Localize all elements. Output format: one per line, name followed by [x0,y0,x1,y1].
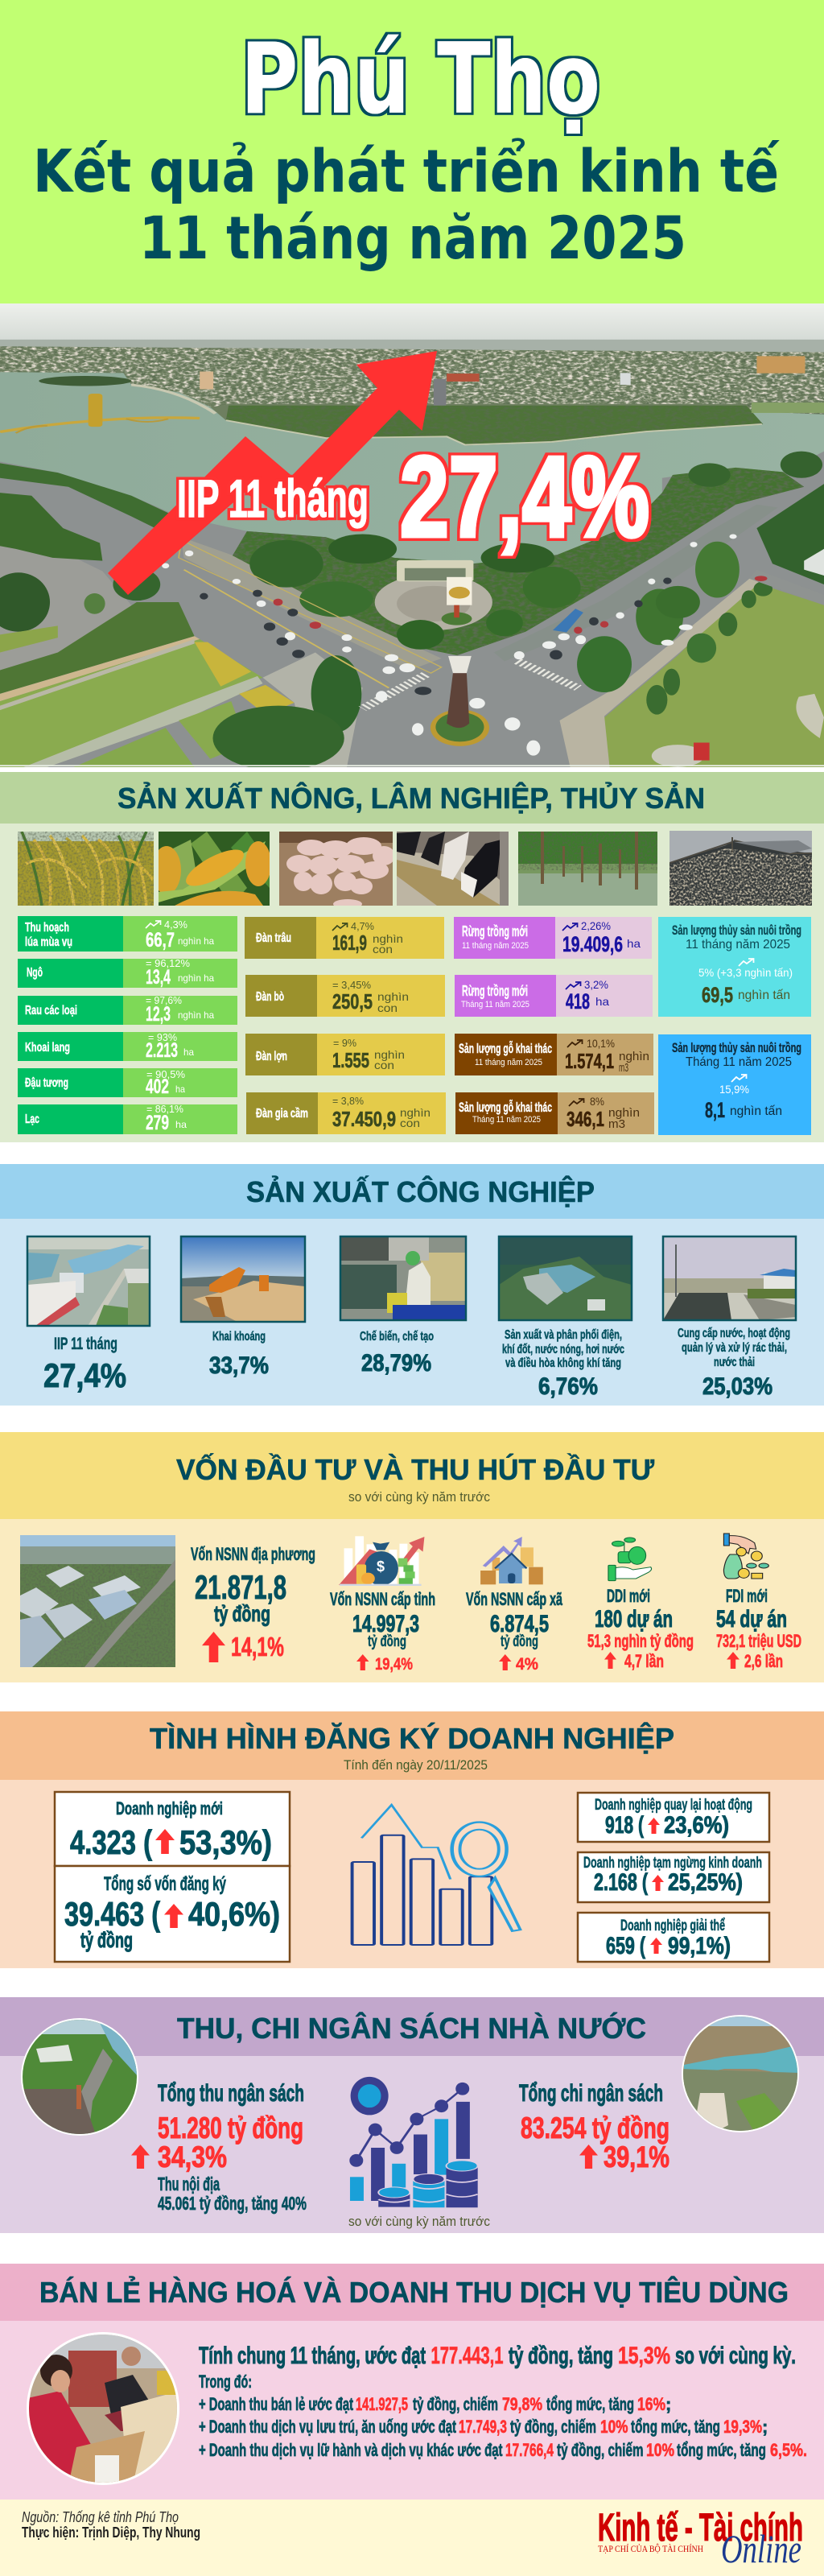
row: sweet potato: ha [183,1046,194,1058]
arrow: up 2,6 times [727,1652,740,1669]
label: of which: Trong đó: [199,2372,252,2392]
card: aquaculture 11 months [658,917,811,1017]
row: pigs: 1.555 [332,1048,369,1072]
summary sentence: 177.443,1 [431,2343,504,2369]
bullet: retail revenue: 16% [637,2394,665,2414]
row: pigs: Đàn lợn [256,1050,287,1063]
row: buffalo: Đàn trâu [256,931,291,945]
stat: FDI: FDI mới [726,1586,768,1606]
arrow: up 34,3% [131,2145,150,2169]
title banner [0,0,824,303]
stat: commune budget capital: Vốn NSNN cấp xã [466,1589,562,1609]
card: registered capital: Tổng số vốn đăng ký [104,1873,226,1895]
photo: fish farming [670,831,812,906]
stat: water and waste: 25,03% [702,1373,772,1400]
row: poultry: 37.450,9 [332,1107,396,1131]
bullet: accommodation and food revenue: ; [762,2417,768,2437]
row: rice harvest: nghìn ha [178,935,214,947]
row: sweet potato: = 93% [148,1031,177,1043]
stat: mining: Khai khoáng [212,1330,266,1344]
stat: total expenditure: 39,1% [604,2140,670,2174]
stat: total revenue: Thu nội địa [158,2174,220,2194]
stat: provincial budget capital: tỷ đồng [368,1633,406,1650]
row: pigs: nghìn [374,1048,405,1061]
icon: hand holding seedling and coin [608,1538,652,1581]
card: aquaculture November: 15,9% [719,1083,749,1096]
row: buffalo [245,917,444,959]
card: registered capital: 40,6%) [188,1895,280,1933]
card: new enterprises: Doanh nghiệp mới [116,1798,223,1818]
bullet: retail revenue: + Doanh thu bán lẻ ước đạt [199,2394,353,2414]
arrow: up 39,1% [579,2145,598,2169]
arrow: up 14,1% [202,1632,225,1662]
row: buffalo: 4,7% [351,920,374,932]
stat: mining: 33,7% [209,1352,269,1379]
arrow: up 4% [499,1654,512,1670]
stat: water and waste: nước thải [714,1356,755,1369]
row: new forest November: 418 [566,989,590,1013]
heading: retail: BÁN LẺ HÀNG HOÁ VÀ DOANH THU DỊCH VỤ TIÊU DÙNG [39,2275,789,2309]
stat: total revenue: Tổng thu ngân sách [158,2080,304,2107]
source credit: Nguồn: Thống kê tỉnh Phú Thọ [22,2509,179,2525]
stat: total expenditure: 83.254 tỷ đồng [521,2112,670,2145]
panel: retail and consumer services [0,2264,824,2500]
row: new forest November: Rừng trồng mới [462,983,528,999]
card: registered capital [55,1866,290,1962]
card: registered capital: 39.463 ( [64,1895,160,1933]
row: soybean: Đậu tương [25,1076,68,1090]
row: timber November: Tháng 11 năm 2025 [472,1115,541,1125]
row: new forest 11 months: 19.409,6 [562,932,623,956]
icon: house with coin stacks [480,1537,543,1584]
card: resumed operations [578,1793,769,1842]
stat: manufacturing [360,1330,434,1377]
row: soybean: 402 [146,1075,169,1098]
row: vegetables: Rau các loại [25,1004,77,1018]
bullet: retail revenue: 141.927,5 [356,2394,408,2414]
row: timber November: m3 [608,1117,625,1131]
row: cattle [245,975,445,1017]
stat: total revenue: 34,3% [158,2140,227,2174]
photo: pigs [279,832,393,906]
row: poultry [246,1092,446,1134]
forestry table [454,917,654,1134]
publisher logo [598,2507,803,2571]
row: rice harvest [18,916,237,952]
row: cattle: 250,5 [332,989,373,1013]
panel: state budget [0,1997,824,2233]
crop table [18,916,237,1134]
stat: FDI [716,1586,801,1671]
stat: FDI: 2,6 lần [744,1651,783,1671]
bullet: travel and other services revenue: + Doanh thu dịch vụ lữ hành và dịch vụ khác ước đạt [199,2440,503,2460]
stat: DDI: 180 dự án [595,1606,673,1633]
photo: circular aerial city left [21,2017,138,2137]
row: cattle: Đàn bò [256,990,284,1004]
frame: photo 1 [27,1236,150,1326]
row: pigs: = 9% [333,1037,356,1049]
row: new forest November: ha [595,995,609,1008]
stat: local budget capital: 14,1% [231,1632,284,1662]
card: registered capital: tỷ đồng [80,1928,133,1952]
photo: corn [159,832,270,906]
photo: industrial park [28,1237,149,1325]
bullet: retail revenue: tổng mức, tăng [546,2394,634,2414]
row: peanut: Lạc [25,1113,39,1126]
card: aquaculture November: Tháng 11 năm 2025 [686,1055,792,1069]
photo: mining excavator [182,1237,304,1321]
row: vegetables: = 97,6% [146,994,182,1006]
icon: money bag with growth chart: $ [377,1558,385,1575]
row: peanut: ha [175,1119,187,1130]
stat: manufacturing: Chế biến, chế tạo [360,1330,434,1344]
subtitle line 2: 11 tháng năm 2025 [139,204,686,273]
frame: photo 4 [499,1236,632,1320]
row: timber November: Sản lượng gỗ khai thác [459,1100,552,1115]
photo: rice [18,832,154,906]
stat: electricity: khí đốt, nước nóng, hơi nước [502,1343,624,1356]
card: aquaculture November: nghìn tấn [730,1104,782,1118]
bullet: accommodation and food revenue: tỷ đồng, chiếm [510,2417,596,2437]
stat: mining [209,1330,269,1379]
card: dissolved: 659 ( [606,1933,645,1959]
stat: DDI: 4,7 lần [624,1651,664,1671]
footer [0,2500,824,2576]
stat: electricity [502,1328,624,1400]
hero photo: aerial view of the city and lake [0,303,824,767]
row: pigs: con [374,1059,394,1071]
icon: money bag with growth chart [339,1536,424,1586]
stat: total expenditure [519,2080,670,2174]
main title: Phú Thọ: Phú Thọ [241,23,600,136]
card: dissolved: 99,1%) [668,1933,731,1959]
stat: commune budget capital [466,1589,562,1674]
row: timber 11 months: 1.574,1 [565,1049,614,1073]
row: timber 11 months: nghìn [619,1050,649,1063]
row: poultry: Đàn gia cầm [256,1107,308,1121]
row: timber November: 346,1 [566,1107,604,1131]
row: poultry: con [400,1117,420,1129]
panel: agriculture, forestry, fishery [0,772,824,1142]
card: aquaculture 11 months: 5% (+3,3 nghìn tấn) [698,966,793,979]
row: vegetables: 12,3 [146,1003,171,1026]
panel: investment capital [0,1432,824,1682]
row: buffalo: 161,9 [332,931,367,955]
bullet: retail revenue: ; [665,2394,671,2414]
panel: industrial production [0,1164,824,1406]
card: new enterprises: 4.323 ( [70,1823,152,1861]
summary sentence: Tính chung 11 tháng, ước đạt [199,2343,426,2369]
heading: agriculture: SẢN XUẤT NÔNG, LÂM NGHIỆP, THỦY SẢN [117,781,705,815]
publisher logo: TẠP CHÍ CỦA BỘ TÀI CHÍNH [598,2543,703,2554]
photo: manufacturing workshop [341,1237,465,1319]
authors credit: Thực hiện: Trịnh Diệp, Thy Nhung [22,2524,200,2541]
row: buffalo: con [373,943,393,956]
heading: budget: THU, CHI NGÂN SÁCH NHÀ NƯỚC [177,2011,646,2045]
row: peanut: 279 [146,1112,169,1134]
red growth arrow [108,351,437,595]
photo: industrial zone aerial [20,1535,175,1667]
stat: local budget capital: Vốn NSNN địa phương [191,1544,315,1564]
row: sweet potato: 2.213 [146,1039,178,1062]
card: resumed operations: 23,6%) [664,1812,729,1839]
stat: commune budget capital: 4% [516,1655,538,1674]
row: new forest November: Tháng 11 năm 2025 [461,1000,529,1009]
card: temporarily suspended: 25,25%) [668,1869,743,1896]
row: peanut: = 86,1% [146,1103,183,1115]
card: aquaculture 11 months: nghìn tấn [738,989,790,1002]
row: timber 11 months: m3 [619,1061,628,1075]
bullet: accommodation and food revenue: + Doanh thu dịch vụ lưu trú, ăn uống ước đạt [199,2417,456,2437]
stat: DDI [587,1586,694,1671]
photo: planted forest [518,832,657,906]
bullet: retail revenue: 79,8% [502,2394,542,2414]
row: cattle: nghìn [377,990,409,1003]
row: timber 11 months: 11 tháng năm 2025 [475,1058,542,1067]
bullet: retail revenue [199,2394,671,2414]
row: timber 11 months [455,1034,653,1075]
stat: FDI: 54 dự án [716,1606,787,1633]
row: peanut [18,1103,237,1134]
photo: dairy cows [397,832,509,906]
caption: compared to last year: so với cùng kỳ năm trước [348,2214,490,2229]
subheading: compared to last year: so với cùng kỳ năm trước [348,1489,490,1505]
row: cattle: con [377,1001,398,1014]
row: new forest 11 months [454,917,652,959]
stat: local budget capital: tỷ đồng [214,1601,270,1626]
stat: DDI: 51,3 nghìn tỷ đồng [587,1631,694,1651]
card: dissolved: Doanh nghiệp giải thể [620,1918,725,1934]
card: temporarily suspended: 2.168 ( [594,1869,648,1896]
card: aquaculture 11 months: 11 tháng năm 2025 [686,938,790,952]
bullet: accommodation and food revenue: 10% [600,2417,628,2437]
row: rice harvest: lúa mùa vụ [25,935,72,949]
card: new enterprises [55,1792,290,1866]
bullet: travel and other services revenue: 17.766,4 [505,2440,554,2460]
row: buffalo: nghìn [373,932,403,945]
stat: water and waste [678,1327,790,1400]
frame: photo 3 [340,1236,466,1320]
stat: IIP [43,1335,126,1394]
card: aquaculture 11 months: 69,5 [702,983,733,1007]
icon: coins and rising bars [349,2077,478,2207]
row: sweet potato: Khoai lang [25,1041,70,1055]
stat: commune budget capital: tỷ đồng [501,1633,538,1650]
heading: enterprise registration: TÌNH HÌNH ĐĂNG KÝ DOANH NGHIỆP [150,1721,674,1755]
row: rice harvest: 66,7 [146,929,175,952]
bullet: travel and other services revenue: tỷ đồng, chiếm [557,2440,644,2460]
arrow: up 4,7 times [604,1652,616,1669]
arrow: up 19,4% [356,1654,369,1670]
bullet: travel and other services revenue: 10% [646,2440,674,2460]
stat: provincial budget capital [330,1589,435,1674]
row: poultry: = 3,8% [332,1095,364,1107]
bullet: accommodation and food revenue: 19,3% [723,2417,762,2437]
stat: total revenue [131,2080,307,2214]
stat: total revenue: 51.280 tỷ đồng [158,2112,303,2145]
row: rice harvest: 4,3% [164,919,187,931]
row: maize: = 96,12% [146,957,190,969]
row: timber November: nghìn [608,1106,640,1120]
row: timber November: 8% [590,1095,604,1108]
row: maize [18,957,237,989]
stat: DDI: DDI mới [607,1586,650,1606]
row: maize: Ngô [27,966,43,980]
summary sentence: tỷ đồng, tăng [509,2343,613,2369]
panel: enterprise registration [0,1711,824,1968]
stat: provincial budget capital: Vốn NSNN cấp tỉnh [330,1589,435,1609]
row: soybean: = 90,5% [146,1068,185,1080]
hero label: IIP 11 tháng: IIP 11 tháng [177,469,369,528]
photo: circular aerial city right [682,2015,799,2136]
bullet: travel and other services revenue: 6,5%. [770,2440,807,2460]
row: vegetables: nghìn ha [178,1009,214,1021]
row: new forest November: 3,2% [584,978,608,991]
stat: electricity: và điều hòa không khí tăng [505,1356,621,1370]
card: new enterprises: 53,3%) [179,1823,272,1861]
row: soybean: ha [175,1084,185,1095]
row: sweet potato [18,1031,237,1062]
row: timber 11 months: Sản lượng gỗ khai thác [459,1041,552,1056]
card: dissolved [578,1913,769,1962]
icon: bar chart with magnifier [352,1805,521,1945]
icon: hand dropping coin into money plant [723,1534,768,1579]
subheading: as of date: Tính đến ngày 20/11/2025 [344,1757,488,1773]
stat: IIP: IIP 11 tháng [54,1335,117,1353]
bullet: retail revenue: tỷ đồng, chiếm [413,2394,498,2414]
row: maize: nghìn ha [178,972,214,984]
row: maize: 13,4 [146,966,171,989]
stat: total expenditure: Tổng chi ngân sách [519,2080,663,2107]
row: pigs [245,1034,445,1075]
stat: local budget capital: 21.871,8 [195,1568,286,1606]
stat: provincial budget capital: 19,4% [375,1655,413,1674]
summary sentence: 15,3% [618,2343,670,2369]
row: soybean [18,1068,237,1098]
stat: electricity: Sản xuất và phân phối điện, [505,1328,622,1342]
frame: photo 2 [181,1236,305,1322]
row: new forest 11 months: ha [627,937,641,950]
card: aquaculture November [658,1034,811,1135]
livestock table [245,917,446,1134]
bullet: accommodation and food revenue: tổng mức, tăng [631,2417,720,2437]
row: new forest November [455,975,653,1017]
photo: water treatment [664,1237,795,1319]
frame: photo 5 [663,1236,796,1320]
row: cattle: = 3,45% [332,979,371,991]
card: aquaculture November: 8,1 [705,1098,725,1122]
row: timber 11 months: 10,1% [587,1037,615,1050]
row: new forest 11 months: Rừng trồng mới [462,923,528,939]
heading: investment: VỐN ĐẦU TƯ VÀ THU HÚT ĐẦU TƯ [176,1452,654,1486]
stat: provincial budget capital: 14.997,3 [352,1611,419,1637]
bullet: accommodation and food revenue [199,2417,768,2437]
stat: total revenue: 45.061 tỷ đồng, tăng 40% [158,2193,307,2214]
stat: local budget capital [191,1544,315,1662]
stat: IIP: 27,4% [43,1356,126,1394]
row: poultry: nghìn [400,1106,431,1119]
bullet: accommodation and food revenue: 17.749,3 [459,2417,507,2437]
row: vegetables [18,994,237,1026]
stat: manufacturing: 28,79% [361,1350,431,1377]
photo: circular supermarket shoppers [24,2332,180,2485]
card: resumed operations: 918 ( [605,1812,644,1839]
photo: power plant [500,1237,631,1319]
row: rice harvest: Thu hoạch [25,921,69,935]
card: temporarily suspended [578,1852,769,1902]
heading: industry: SẢN XUẤT CÔNG NGHIỆP [246,1174,595,1208]
row: timber November [455,1092,654,1134]
summary sentence [199,2343,796,2369]
stat: commune budget capital: 6.874,5 [490,1611,549,1637]
bullet: travel and other services revenue: tổng mức, tăng [677,2440,766,2460]
row: new forest 11 months: 2,26% [581,919,611,932]
stat: electricity: 6,76% [538,1373,598,1400]
row: new forest 11 months: 11 tháng năm 2025 [462,941,529,951]
hero figure: 27,4%: 27,4% [400,433,649,561]
